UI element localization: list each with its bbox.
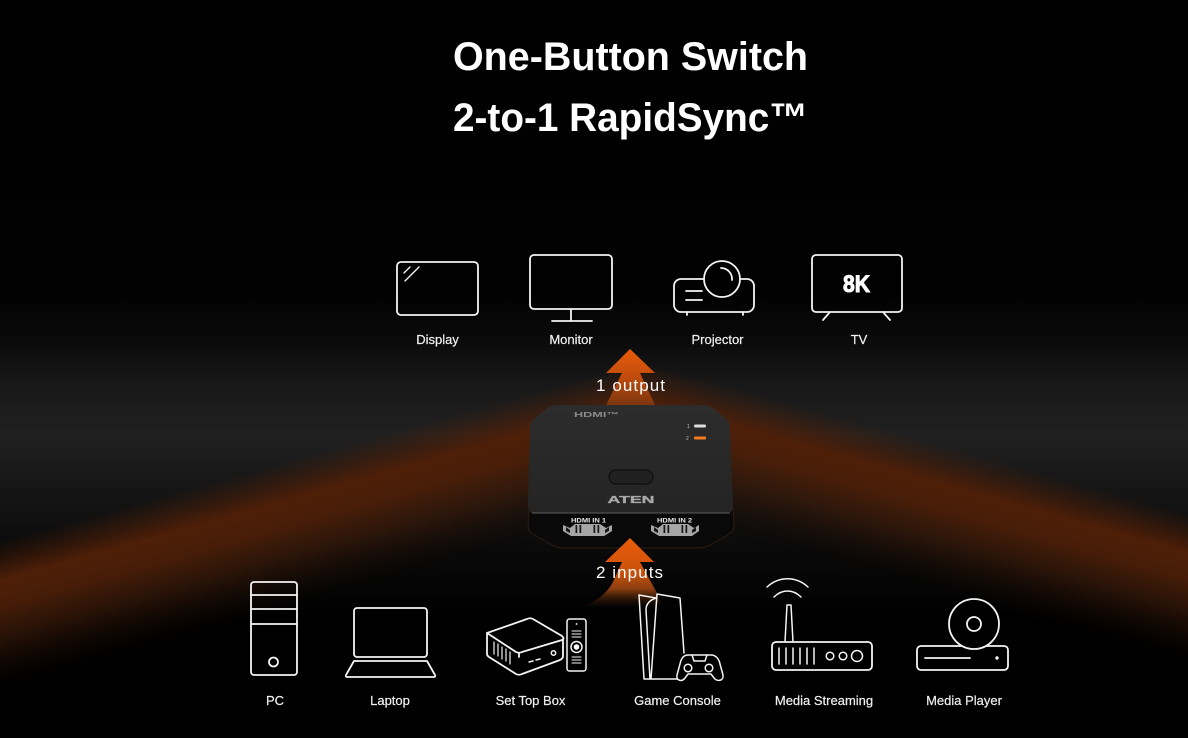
HDMI logo: HDMI™ <box>574 410 619 419</box>
label: game console: Game Console <box>634 693 721 708</box>
arrow: output <box>606 349 655 405</box>
HDMI port 2 <box>651 524 699 536</box>
icon: TV 8K: 8K <box>843 271 871 298</box>
label: monitor: Monitor <box>549 332 593 347</box>
orange light band: left <box>0 374 622 672</box>
label: media streaming: Media Streaming <box>775 693 873 708</box>
label: TV: TV <box>851 332 868 347</box>
icon: laptop <box>346 608 435 677</box>
LED indicators <box>686 424 706 442</box>
title: One-Button Switch <box>453 35 808 79</box>
device: ATEN switch <box>528 405 734 548</box>
arrow: inputs <box>585 538 661 606</box>
title: 2-to-1 RapidSync™ <box>453 96 808 140</box>
label: laptop: Laptop <box>370 693 410 708</box>
icon: display <box>397 262 478 315</box>
label: display: Display <box>416 332 459 347</box>
label: PC: PC <box>266 693 284 708</box>
title <box>453 35 808 140</box>
device top face <box>528 405 733 513</box>
icon: game console <box>639 594 723 680</box>
text: 1 output: 1 output <box>596 376 665 395</box>
icon: projector <box>674 261 754 315</box>
icon: TV 8K <box>812 255 902 320</box>
label: media player: Media Player <box>926 693 1003 708</box>
label: projector: Projector <box>691 332 744 347</box>
orange light band: right <box>640 370 1188 644</box>
icon: media streaming router <box>767 579 872 670</box>
icon: monitor <box>530 255 612 321</box>
port label 1: HDMI IN 1 <box>571 518 607 524</box>
device edge highlight <box>532 512 730 514</box>
icon: set top box <box>487 618 586 675</box>
port label 2: HDMI IN 2 <box>657 518 693 524</box>
icon: PC <box>251 582 297 675</box>
LED indicators: 1 <box>687 424 690 430</box>
HDMI port 1 <box>563 524 612 536</box>
icon: media player <box>917 599 1008 670</box>
device front face <box>528 508 734 548</box>
label: set top box: Set Top Box <box>496 693 566 708</box>
text: 2 inputs: 2 inputs <box>596 563 663 582</box>
push button <box>609 470 653 484</box>
ATEN logo: ATEN <box>608 494 654 506</box>
LED indicators: 2 <box>686 436 689 442</box>
